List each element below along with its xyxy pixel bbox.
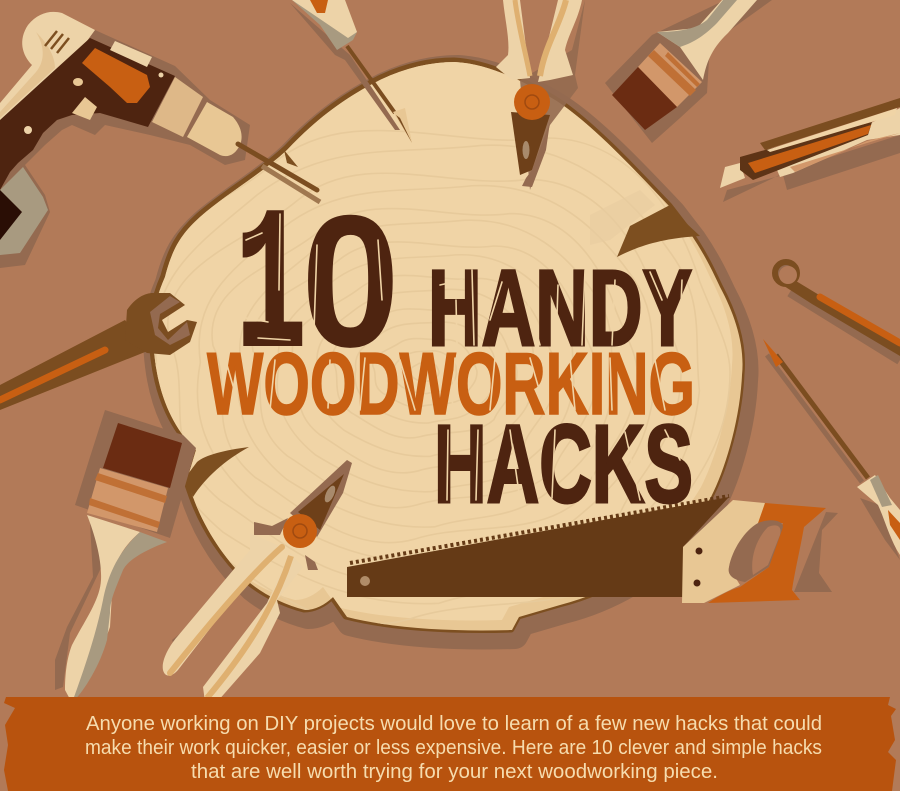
drill vents — [45, 31, 69, 53]
saw handle orange — [708, 503, 826, 603]
icon: top pliers — [496, 0, 585, 190]
log highlights — [590, 190, 655, 245]
title: HANDY: HANDY — [428, 247, 692, 368]
drill orange grip — [82, 48, 150, 103]
banner text: that are well worth trying for your next woodworking piece. — [191, 761, 718, 783]
drill bit shadow — [262, 166, 320, 202]
icon: top screwdriver — [290, 0, 412, 143]
drill shadow — [0, 30, 250, 268]
log shadow — [156, 68, 746, 636]
icon: bottom pliers — [163, 460, 352, 702]
wrench handle — [784, 281, 900, 356]
title: 10: 1 — [236, 178, 306, 405]
icon: left wrench — [0, 293, 197, 410]
tree rings — [119, 131, 730, 624]
drill battery — [0, 167, 48, 255]
saw teeth — [350, 496, 729, 563]
title: 10: 0 — [301, 176, 400, 386]
drill chuck — [152, 77, 203, 137]
banner text: make their work quicker, easier or less expensive. Here are 10 clever and simple hacks — [85, 737, 822, 759]
icon: right screwdriver — [763, 339, 900, 560]
banner text: Anyone working on DIY projects would love to learn of a few new hacks that could — [86, 713, 822, 735]
crack left — [185, 447, 249, 497]
saw rivets — [696, 548, 702, 554]
wrench handle — [0, 320, 150, 410]
saw handle shadow — [794, 512, 838, 592]
title — [207, 176, 695, 526]
log face — [153, 62, 743, 630]
crack top left — [284, 150, 298, 167]
drill tab — [110, 41, 152, 67]
wrench shadow — [790, 292, 900, 360]
intro banner — [4, 697, 896, 791]
saw blade — [347, 497, 729, 597]
saw grip hole — [729, 520, 783, 582]
saw handle cream — [682, 500, 765, 603]
saw blade hole — [360, 576, 370, 586]
banner background — [4, 697, 896, 791]
crack top right — [617, 205, 700, 257]
icon: saw — [347, 496, 838, 603]
drill bit — [238, 144, 317, 190]
icon: right wrench — [775, 262, 900, 360]
icon: top brush — [605, 0, 772, 143]
banner text — [85, 713, 822, 783]
icon: bottom-left brush — [55, 410, 196, 703]
title: HACKS: HACKS — [434, 403, 693, 526]
drill cream body — [0, 12, 95, 125]
wrench head — [125, 293, 197, 355]
drill dark body — [0, 38, 175, 190]
wood slice — [119, 52, 746, 636]
icon: utility knife — [720, 98, 900, 202]
drill studs — [73, 78, 83, 86]
title wood-grain slits — [225, 214, 682, 500]
drill trigger guard — [72, 97, 97, 120]
log lighter centre — [143, 52, 733, 620]
icon: drill — [0, 12, 320, 268]
log bark rim — [152, 61, 742, 629]
drill grip highlight — [0, 32, 55, 118]
wrench ring — [775, 262, 797, 284]
